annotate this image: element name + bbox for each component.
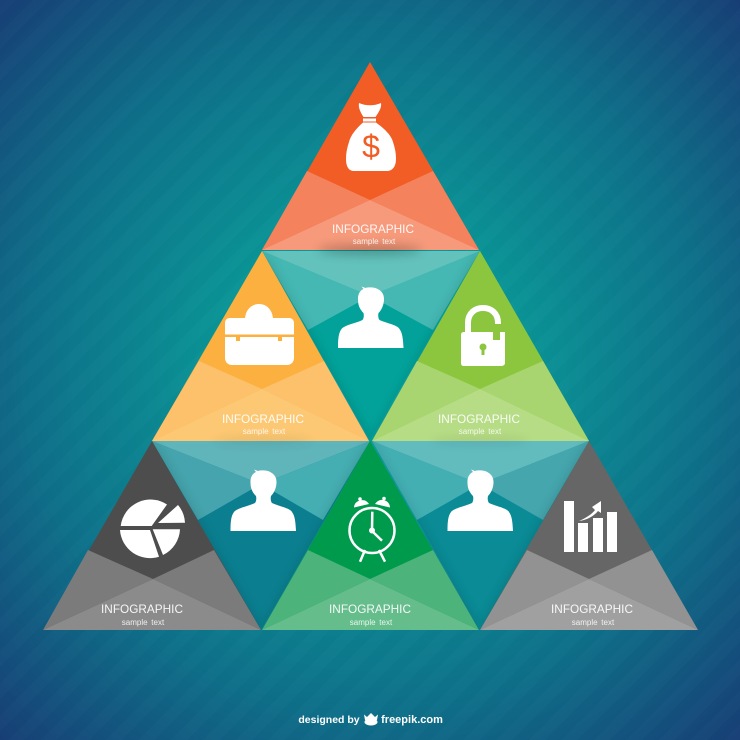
panel: centre inverted triangle	[262, 251, 480, 440]
label: mid grey triangle: INFOGRAPHIC	[551, 602, 633, 616]
icon: person right	[448, 470, 513, 531]
label: dark grey triangle: INFOGRAPHIC	[101, 602, 183, 616]
footer credit: freepik.com	[381, 714, 443, 726]
label: lime triangle: INFOGRAPHIC	[438, 412, 520, 426]
label: orange triangle	[222, 412, 304, 436]
label: orange triangle: INFOGRAPHIC	[222, 412, 304, 426]
icon: alarm clock	[350, 497, 394, 562]
panel: lower-right inverted triangle	[372, 441, 589, 628]
label: green triangle	[329, 602, 411, 627]
panel: mid grey triangle	[480, 441, 698, 630]
footer credit: designed by	[298, 714, 360, 726]
label: dark grey triangle	[101, 602, 183, 627]
icon: person left	[230, 470, 296, 531]
icon: rising bar chart	[564, 501, 617, 552]
icon: crown	[364, 713, 378, 726]
label: mid grey triangle: sample text	[572, 618, 615, 627]
panel: dark grey triangle	[43, 441, 261, 630]
icon: briefcase	[225, 304, 294, 365]
label: green triangle: sample text	[350, 618, 393, 627]
label: green triangle: INFOGRAPHIC	[329, 602, 411, 616]
label: mid grey triangle	[551, 602, 633, 627]
label: top triangle: INFOGRAPHIC	[332, 222, 414, 236]
label: lime triangle: sample text	[459, 427, 502, 436]
label: top triangle: sample text	[353, 237, 396, 246]
label: top triangle	[332, 222, 414, 246]
panel: green triangle	[262, 441, 479, 630]
label: lime triangle	[438, 412, 520, 436]
icon: money bag: $	[362, 128, 380, 164]
panel: lower-left inverted triangle	[152, 441, 370, 628]
icon: person top	[338, 286, 404, 348]
footer credit	[298, 713, 443, 726]
pyramid infographic	[43, 62, 698, 726]
label: orange triangle: sample text	[243, 427, 286, 436]
label: dark grey triangle: sample text	[122, 618, 165, 627]
panel: orange triangle	[152, 251, 369, 445]
panel: top orange triangle	[262, 62, 479, 255]
icon: pie chart	[120, 500, 185, 558]
panel: lime triangle	[372, 251, 589, 445]
icon: money bag	[346, 103, 396, 171]
icon: open padlock	[461, 308, 505, 366]
